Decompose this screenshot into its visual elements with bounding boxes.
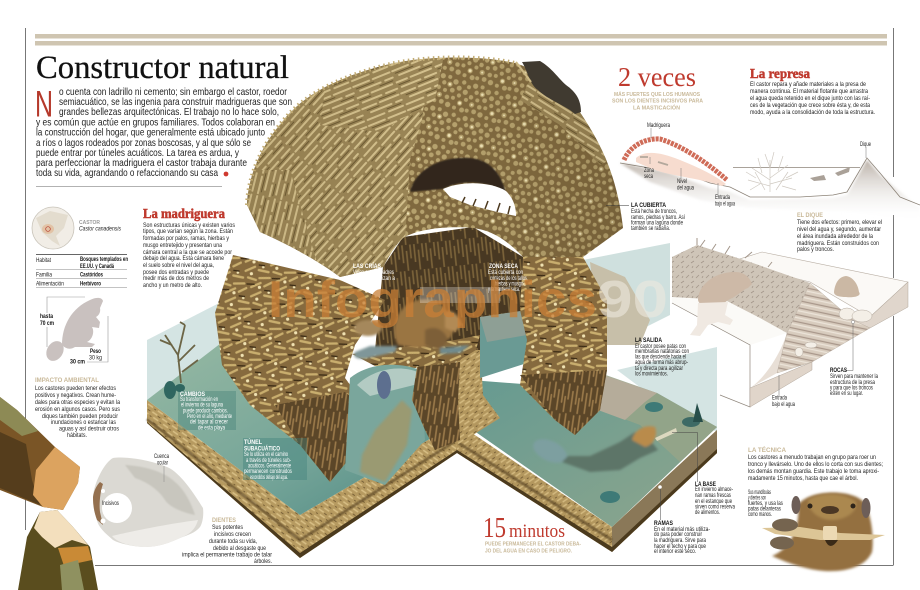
callout: la salida: membranas natatorias con: [635, 349, 689, 355]
callout: ramas: hacer el techo y para que: [654, 544, 707, 550]
intro text block: la construcción del hogar, que generalmente está ubicado junto: [36, 128, 265, 138]
text block: el dique: el área inundada alrededor de la: [797, 234, 874, 240]
intro text block: semiacuático, se las ingenia para construir madrigueras que son: [59, 97, 292, 108]
branch in the mouth: [655, 428, 677, 441]
callout: la base: [672, 432, 735, 516]
text block: la madriguera: medir más de dos metros de: [143, 276, 210, 282]
data table: Familia: [36, 272, 53, 278]
callout: rocas: y para que los troncos: [830, 386, 873, 392]
text block: la tecnica: LA TÉCNICA: [748, 446, 787, 454]
intro text block: o cuenta con ladrillo ni cemento; sin embargo el castor, roedor: [59, 87, 287, 98]
text block: la tecnica: patas delanteras: [748, 506, 781, 512]
section diagram: lodge and dam profile: bajo el agua: [715, 202, 735, 208]
right pile fringe: [520, 370, 607, 435]
text block: dientes: debido al desgaste que: [213, 546, 267, 552]
text block: la represa: La represa: [750, 67, 810, 82]
callout: rocas: estructura de la presa: [830, 380, 876, 386]
size diagram: beaver silhouette: hasta: [40, 314, 54, 320]
callout: la salida: El castor posee patas con: [635, 344, 686, 350]
data table: Castóridos: [80, 272, 103, 278]
text block: 2 veces: LA MASTICACIÓN: [633, 104, 680, 112]
text block: el dique: [797, 213, 882, 253]
text block: dientes: DIENTES: [212, 518, 236, 524]
fish: [810, 175, 826, 181]
text block: 15 minutos: JO DEL AGUA EN CASO DE PELIGRO.: [485, 548, 572, 554]
caption: tunel subacuatico: [243, 438, 307, 481]
caption: tunel subacuatico: escondidos debajo del agua.: [250, 475, 288, 481]
label: entrada bajo el agua: bajo el agua: [772, 402, 795, 408]
beaver pup: [354, 320, 382, 336]
text block: la tecnica: tronco y llevárselo. Uno de ellos lo corta con sus dientes;: [748, 462, 883, 468]
callout: rocas: Sirven para mantener la: [830, 374, 878, 380]
dome: lower-left sticks: [247, 170, 317, 262]
water pool in chamber: [480, 317, 527, 378]
callout: rocas: ROCAS: [830, 368, 847, 374]
text block: el dique: Tiene dos efectos: primero, elevar el: [797, 220, 882, 226]
text block: la represa: el agua queda retenido en el dique junto con las raí-: [750, 96, 870, 102]
data table: [36, 254, 128, 288]
ground shadow: [620, 160, 920, 222]
text block: impacto ambiental: hábitats.: [67, 433, 87, 439]
ground slab: left: [147, 400, 457, 558]
label: entrada bajo el agua: [772, 375, 795, 408]
text block: impacto ambiental: erosión en algunos casos. Pero sus: [35, 407, 120, 413]
intro text block: puede entrar por túneles acuáticos. La tarea es ardua, y: [36, 148, 240, 159]
side faces: [840, 282, 908, 328]
callout: ramas: el interior esté seco.: [654, 549, 696, 555]
opening in the dome: [443, 183, 516, 216]
text block: la madriguera: debajo del agua. Esta cámara tiene: [143, 256, 225, 262]
intro text block: toda su vida, agrandando o refaccionando su casa: [36, 168, 218, 179]
data table: Habitat: [36, 258, 51, 264]
callout: la salida: LA SALIDA: [635, 338, 663, 344]
text block: la madriguera: Son estructuras únicas y existen varios: [143, 223, 235, 229]
section diagram: lodge and dam profile: Zona: [644, 168, 654, 174]
text block: la represa: manera continua. El material flotante que arrastra: [750, 89, 869, 95]
text block: la tecnica: como manos.: [748, 512, 772, 518]
caption: cambios: el invierno de su laguna: [181, 402, 223, 408]
central earth column: [440, 340, 500, 445]
icon: range globe: [32, 207, 74, 249]
section diagram: lodge and dam profile: Dique: [860, 142, 871, 148]
slope: [750, 333, 790, 388]
callout: la salida: las que desciende hacia el: [635, 354, 686, 360]
section diagram: lodge and dam profile: seca: [644, 174, 653, 180]
text block: impacto ambiental: IMPACTO AMBIENTAL: [35, 378, 99, 384]
label: entrada bajo el agua: Entrada: [772, 396, 787, 402]
data table: Herbívoro: [80, 282, 101, 288]
beaver on top of the dome: [522, 61, 581, 114]
callout: la salida: [635, 338, 689, 378]
text block: impacto ambiental: positivos y negativos. Crean hume-: [35, 393, 116, 399]
text block: impacto ambiental: Los castores pueden tener efectos: [35, 386, 116, 392]
data table: Bosques templados en: [80, 257, 128, 263]
caption: tunel subacuatico: acuáticos. Generalmente: [248, 464, 291, 470]
caption: zona seca: ZONA SECA: [489, 264, 519, 270]
illustration: beaver skull: ocular: [157, 460, 168, 466]
water surface: right: [470, 380, 717, 527]
text block: la represa: modo, ayuda a la consolidación de toda la estructura.: [750, 110, 875, 116]
data table: EE.UU. y Canadá: [80, 264, 114, 270]
lodge dome: [624, 139, 727, 180]
caption: las crias: LAS CRÍAS: [353, 262, 381, 270]
intro text block: grandes bellezas arquitectónicas. El trabajo no lo hace solo,: [59, 107, 279, 118]
text block: la tecnica: y dientes son: [748, 496, 766, 502]
intro text block: y es común que actúe en grupos familiares. Todos colaboran en: [36, 118, 275, 128]
callout: rocas: [830, 320, 878, 397]
dead shrub: [160, 322, 198, 383]
rocks: [795, 308, 872, 356]
size diagram: beaver silhouette: Peso: [90, 349, 101, 355]
dome: right sticks: [520, 82, 607, 165]
section labels: [650, 128, 866, 197]
stick pile under nest: [412, 362, 460, 450]
caption: tunel subacuatico: SUBACUÁTICO: [244, 446, 280, 452]
text block: el dique: EL DIQUE: [797, 213, 823, 219]
text block: 2 veces: [612, 62, 703, 112]
dam log face: [777, 283, 870, 373]
species card: Castor canadensis: [79, 226, 121, 232]
caption: zona seca: cortezas de los tallos,: [490, 276, 528, 282]
illustration: beaver skull: [93, 454, 203, 547]
dome: [247, 58, 623, 277]
dam crest vegetation: [672, 245, 810, 333]
callout: la base: de alimentos.: [695, 510, 720, 516]
callout: la cubierta: LA CUBIERTA: [631, 203, 667, 209]
caption: cambios: CAMBIOS: [180, 392, 205, 398]
caption: zona seca: hierbas y musgo: [495, 282, 523, 288]
dome: main sticks: [255, 55, 430, 285]
left stick pile: [215, 255, 385, 482]
submerged shrub: [746, 152, 798, 192]
size diagram: beaver silhouette: 70 cm: [40, 321, 54, 327]
nest floor: [352, 335, 480, 368]
text block: dientes: Sus potentes: [212, 525, 243, 531]
text block: la madriguera: posee dos entradas y puede: [143, 270, 210, 276]
callout: la base: LA BASE: [695, 482, 716, 488]
caption: cambios: Pero en el año, mediante: [187, 414, 232, 420]
callout: ramas: En el material más utiliza-: [654, 527, 710, 533]
intro text block: [35, 84, 292, 179]
size diagram: beaver silhouette: [39, 297, 108, 366]
caption: cambios: Su transformación en: [180, 397, 218, 403]
dome: top sticks: [320, 58, 443, 132]
header bars: [35, 34, 887, 46]
size diagram: beaver silhouette: 30 cm: [70, 360, 85, 366]
watermark: Infographics: [268, 271, 597, 329]
caption: las crias: Viven con los padres: [353, 270, 394, 276]
text block: impacto ambiental: dales para otras especies y evitan la: [35, 400, 121, 406]
adult beaver: [354, 299, 470, 359]
dome: log ends: [240, 50, 630, 285]
beaver on the dam: [834, 276, 860, 297]
callout: la base: En invierno almace-: [695, 487, 733, 493]
left pile fringe: [275, 392, 373, 482]
text block: la madriguera: formadas por palos, ramas, hierbas y: [143, 236, 229, 242]
water panels: [147, 243, 717, 432]
callout: la cubierta: ramos, piedras y barro. Así: [631, 215, 685, 221]
caption: cambios: puede producir cambios.: [183, 408, 228, 414]
text block: 15 minutos: 15: [483, 512, 506, 544]
text block: la represa: ces de la vegetación que crece sobre ésta y, de esta: [750, 103, 871, 109]
illustration: beaver skull: Incisivos: [102, 501, 119, 507]
illustration: dam block: [672, 238, 908, 407]
text block: la tecnica: fuertes, y usa las: [748, 501, 783, 507]
dark hollow: [410, 158, 506, 192]
text block: impacto ambiental: diques también pueden producir: [42, 414, 118, 420]
caption: cambios: [178, 391, 236, 432]
illustration: beaver skull: Cuenca: [154, 454, 169, 460]
callout: la base: en el estanque que: [695, 499, 732, 505]
text block: impacto ambiental: inundaciones o estancar las: [51, 420, 116, 426]
callout: la salida: los movimientos.: [635, 372, 668, 378]
text block: el dique: palos y troncos.: [797, 247, 834, 253]
text block: impacto ambiental: aguas y así destruir otros: [59, 426, 119, 432]
caption: zona seca: Está cubierta con: [488, 270, 523, 276]
text block: la madriguera: el suelo sobre el nivel del agua,: [143, 263, 214, 269]
text block: dientes: [182, 518, 272, 565]
text block: 2 veces: MÁS FUERTES QUE LOS HUMANOS: [614, 91, 700, 98]
intro text block: para perfeccionar la madriguera el castor trabaja durante: [36, 158, 247, 169]
ragged dome edge: [247, 57, 515, 205]
caption: las crias: y la independizan a: [353, 276, 396, 282]
text block: dientes: durante toda su vida,: [209, 539, 257, 545]
text block: la madriguera: La madriguera: [143, 207, 225, 222]
text block: la tecnica: Sus mandíbulas: [748, 490, 771, 496]
main illustration: beaver lodge cutaway: [147, 50, 717, 558]
swimming beaver: [529, 426, 658, 472]
text block: la madriguera: [143, 207, 235, 289]
section diagram: lodge and dam profile: Nivel: [677, 179, 687, 185]
callout: la base: nan ramas frescas: [695, 493, 731, 499]
ground slab: right: [457, 423, 717, 552]
callout: ramas: la madriguera. Sirve para: [654, 538, 707, 544]
text block: la madriguera: cámara central a la que se accede por: [143, 250, 232, 256]
block outlines and top surface: [730, 252, 908, 317]
water surface: left: [147, 340, 457, 515]
caption: zona seca: y la mantiene seca.: [488, 287, 520, 293]
callout: ramas: RAMAS: [654, 521, 673, 527]
text block: el dique: nivel del agua y, segundo, aumentar: [797, 227, 881, 233]
callout: la cubierta: forman una laguna donde: [631, 220, 684, 226]
callout: la base: sirven como reserva: [695, 504, 735, 510]
ground profile: [620, 158, 920, 205]
text block: la tecnica: madamente 15 minutos, hasta que cae el árbol.: [748, 476, 858, 482]
caption: tunel subacuatico: a través de túneles sub-: [246, 458, 291, 464]
text block: 15 minutos: [483, 512, 581, 554]
caption: cambios: del tapar al crecer: [190, 420, 228, 426]
data table: Alimentación: [36, 282, 64, 288]
text block: la madriguera: musgo entretejido y presentan una: [143, 243, 223, 249]
text block: el dique: madriguera. Están construidos con: [797, 241, 879, 247]
callout: ramas: [654, 485, 710, 555]
caption: tunel subacuatico: TÚNEL: [244, 439, 262, 446]
text block: la represa: [750, 67, 875, 116]
intro text block: a ríos o lagos rodeados por zonas boscosas, y al que sólo se: [36, 138, 251, 149]
text block: 15 minutos: minutos: [509, 521, 565, 542]
right stick pile: [520, 257, 607, 435]
callout: la salida: ta y directa para agilizar: [635, 366, 683, 372]
callout: la cubierta: [606, 203, 685, 232]
text block: la madriguera: tipos, que varían según la zona. Están: [143, 229, 233, 235]
title: Constructor natural: [36, 50, 289, 86]
submerged beaver: [345, 365, 425, 485]
callout: la salida: agua de forma más abrup-: [635, 360, 688, 366]
species card: CASTOR: [79, 220, 100, 226]
section diagram: lodge and dam profile: Entrada: [715, 195, 730, 201]
section diagram: lodge and dam profile: [620, 123, 920, 222]
lodge interior: [636, 153, 726, 186]
text block: la tecnica: [748, 446, 883, 518]
caption: tunel subacuatico: permanecen construidos: [244, 469, 292, 475]
callout: rocas: estén en su lugar.: [830, 391, 863, 397]
text block: la tecnica: Los castores a menudo trabajan en grupo para roer un: [748, 455, 876, 461]
intro text block: N: [35, 84, 53, 124]
caption: cambios: de esta playa: [198, 426, 225, 432]
text block: la madriguera: ancho y un metro de alto.: [143, 283, 202, 289]
aquatic plants: [164, 381, 703, 503]
lodge chamber: [375, 227, 530, 350]
callout: la cubierta: Está hecha de troncos,: [631, 209, 677, 215]
caption: las crias: los tres años.: [353, 282, 379, 288]
text block: 15 minutos: PUEDE PERMANECER EL CASTOR DEBA-: [485, 542, 581, 548]
text block: 2 veces: 2 veces: [618, 62, 696, 92]
fish: [835, 167, 850, 176]
caption: zona seca: [488, 264, 528, 293]
text block: 2 veces: SON LOS DIENTES INCISIVOS PARA: [612, 98, 703, 104]
water level: [733, 166, 860, 168]
text block: dientes: incisivos crecen: [214, 532, 251, 538]
text block: la tecnica: los demás montan guardia. Este trabajo le toma aproxi-: [748, 469, 879, 475]
caption: las crias: [353, 262, 396, 288]
callout: ramas: do para poder construir: [654, 532, 702, 538]
illustration: gnawed tree trunk: [0, 397, 98, 590]
section diagram: lodge and dam profile: del agua: [677, 186, 694, 192]
text block: impacto ambiental: [35, 378, 121, 439]
text block: dientes: árboles.: [254, 559, 272, 565]
beaver with log: [690, 272, 752, 336]
callout: la cubierta: también se rabaña.: [631, 226, 670, 232]
illustration: beaver head with branch: [762, 493, 885, 571]
species card: [32, 207, 128, 288]
size diagram: beaver silhouette: 30 kg: [89, 356, 102, 362]
text block: dientes: implica el permanente trabajo de talar: [182, 552, 272, 558]
section diagram: lodge and dam profile: Madriguera: [647, 123, 670, 129]
watermark: 90: [597, 271, 668, 329]
caption: tunel subacuatico: Se lo utiliza en el camino: [244, 452, 288, 458]
text block: la represa: El castor repara y añade materiales a la presa de: [750, 82, 867, 88]
